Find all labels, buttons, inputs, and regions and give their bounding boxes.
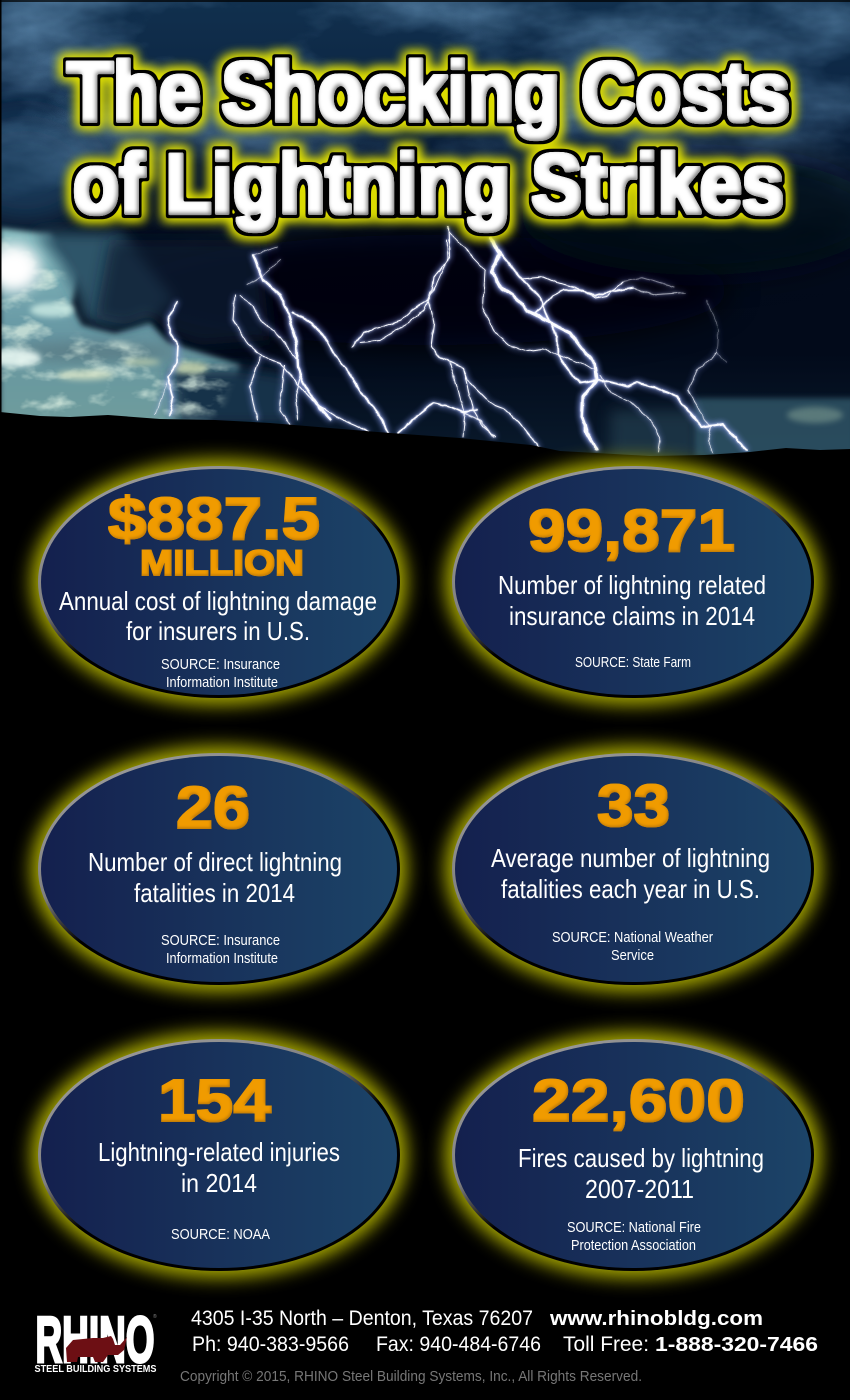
source: Information Institute: [166, 950, 278, 967]
description: Lightning-related injuries: [98, 1137, 340, 1167]
description: for insurers in U.S.: [126, 616, 310, 646]
panel: injuries oval: [31, 1032, 407, 1278]
source: SOURCE: State Farm: [575, 654, 691, 671]
source: [161, 932, 280, 967]
description: Fires caused by lightning: [518, 1143, 764, 1173]
source: SOURCE: National Fire: [567, 1219, 701, 1236]
panel: insurance claims oval: [445, 459, 821, 705]
title: of Lightning Strikes: [73, 137, 784, 231]
description: Number of direct lightning: [88, 847, 342, 877]
stat: 99,871: 99,871: [528, 498, 735, 564]
tagline: STEEL BUILDING SYSTEMS: [34, 1363, 156, 1375]
logo: RHINO Steel Building Systems: ®: [153, 1313, 157, 1320]
description: [498, 570, 766, 631]
description: Annual cost of lightning damage: [59, 586, 377, 616]
panel: direct fatalities oval: [31, 746, 407, 992]
source: SOURCE: National Weather: [552, 929, 713, 946]
footer: phone line: Toll Free:: [563, 1333, 649, 1356]
footer: phone line: Ph: 940-383-9566: [192, 1333, 349, 1356]
logo: RHINO Steel Building Systems: [34, 1303, 157, 1376]
description: [518, 1143, 764, 1204]
logo: RHINO Steel Building Systems: RHINO: [36, 1303, 154, 1376]
source: SOURCE: Insurance: [161, 932, 280, 949]
stat: $887.5 million: [108, 486, 320, 583]
source: [567, 1219, 701, 1254]
source: SOURCE: NOAA: [171, 1226, 270, 1243]
horizon silhouette: [0, 412, 850, 480]
stat: $887.5 million: MILLION: [140, 544, 304, 583]
lightning bolts: [155, 227, 747, 453]
footer: phone line: Fax: 940-484-6746: [376, 1333, 541, 1356]
source: SOURCE: Insurance: [161, 656, 280, 673]
panel: fires oval: [445, 1032, 821, 1278]
panel: annual cost oval: [31, 459, 407, 705]
footer: address line: www.rhinobldg.com: [549, 1308, 763, 1330]
description: Number of lightning related: [498, 570, 766, 600]
description: insurance claims in 2014: [509, 601, 755, 631]
description: in 2014: [181, 1168, 257, 1198]
title: [67, 45, 790, 231]
description: 2007-2011: [585, 1174, 694, 1204]
panel: average fatalities oval: [445, 746, 821, 992]
source: Protection Association: [571, 1237, 696, 1254]
description: [59, 586, 377, 646]
stat: 26: 26: [176, 775, 250, 841]
description: Average number of lightning: [491, 843, 770, 873]
footer: address line: 4305 I-35 North – Denton, Texas 76207: [191, 1307, 533, 1330]
footer: phone line: [192, 1333, 818, 1356]
stat: 22,600: 22,600: [532, 1068, 745, 1134]
footer: address line: [191, 1307, 763, 1330]
stat: 33: 33: [597, 773, 670, 839]
description: [88, 847, 342, 908]
source: [161, 656, 280, 691]
icon: rhino silhouette: [66, 1336, 127, 1362]
lower-left light sky: [0, 228, 240, 425]
stat: $887.5 million: $887.5: [108, 486, 320, 552]
source: Information Institute: [166, 674, 278, 691]
storm sky photograph: [0, 0, 850, 470]
description: fatalities each year in U.S.: [501, 874, 760, 904]
copyright: Copyright © 2015, RHINO Steel Building Systems, Inc., All Rights Reserved.: [180, 1368, 642, 1385]
description: [491, 843, 770, 904]
source: [552, 929, 713, 964]
source: Service: [611, 947, 654, 964]
footer: phone line: 1-888-320-7466: [655, 1334, 818, 1356]
right horizon glow and rain: [610, 410, 700, 460]
description: fatalities in 2014: [134, 878, 295, 908]
stat: 154: 154: [158, 1068, 271, 1134]
description: [98, 1137, 340, 1198]
